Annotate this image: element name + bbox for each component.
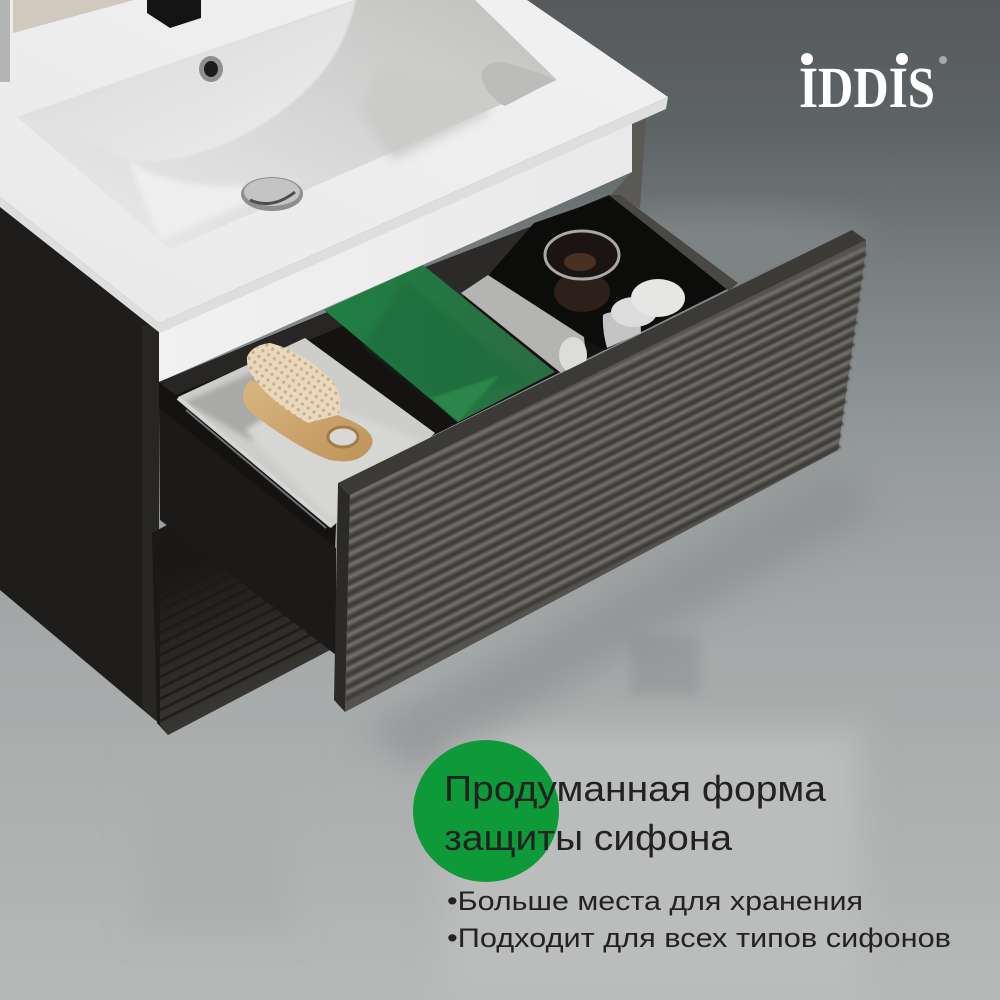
heading: защиты сифона xyxy=(444,817,733,858)
cotton roll xyxy=(461,275,587,373)
left basin lobe xyxy=(25,0,356,161)
basin lower floor xyxy=(128,160,300,240)
cotton pads xyxy=(603,279,685,348)
logo: IDDIS xyxy=(799,55,935,120)
heading xyxy=(444,768,827,858)
heading: Продуманная форма xyxy=(444,768,827,809)
bullet list: •Больше места для хранения xyxy=(447,886,863,916)
handle hole xyxy=(328,427,358,447)
top cap xyxy=(338,230,866,495)
green blob xyxy=(413,740,559,882)
backsplash wall xyxy=(13,0,134,33)
green siphon cover xyxy=(324,265,555,422)
left edge xyxy=(334,483,350,712)
lower drawer front xyxy=(152,525,330,735)
overflow hole xyxy=(199,56,223,82)
ceramic sink top xyxy=(0,0,668,333)
wooden handle xyxy=(243,380,373,461)
bullet list: •Подходит для всех типов сифонов xyxy=(447,923,951,953)
brush xyxy=(243,343,373,461)
towel xyxy=(178,338,435,528)
basin reflection xyxy=(360,67,490,160)
glass bottle xyxy=(0,0,10,82)
bristles xyxy=(247,343,340,423)
drain xyxy=(241,177,303,211)
white apron under sink xyxy=(159,120,632,382)
drawer interior xyxy=(159,195,738,655)
tap xyxy=(147,0,201,28)
basin xyxy=(17,0,557,248)
glass jar xyxy=(545,231,619,312)
ribbed drawer front xyxy=(334,230,866,712)
front panel with ribs xyxy=(345,240,866,712)
cabinet body xyxy=(0,118,646,722)
right basin scoop xyxy=(481,62,555,106)
bullet list xyxy=(447,886,951,953)
